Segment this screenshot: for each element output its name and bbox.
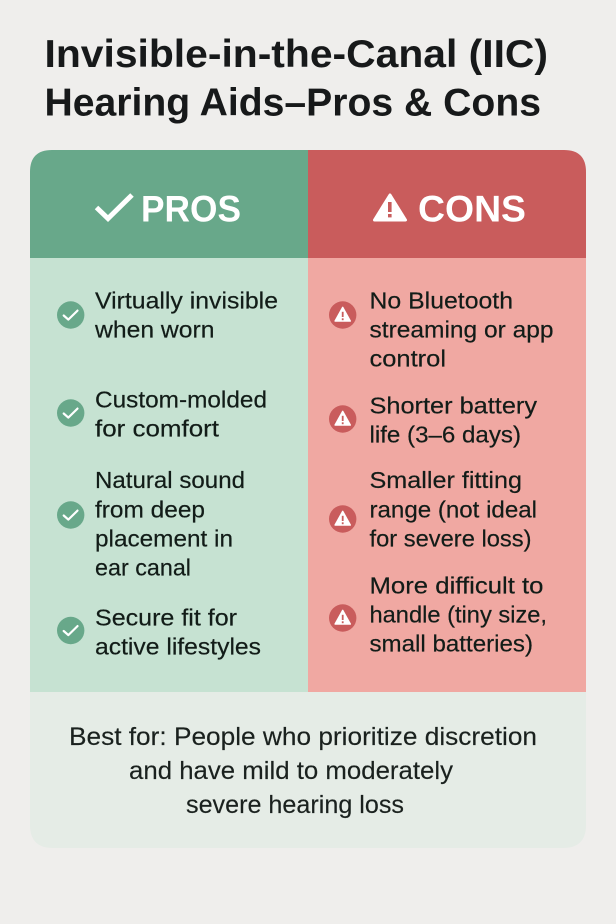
con item: no bluetooth: control [370, 346, 446, 372]
pro item: custom-molded: for comfort [95, 416, 220, 442]
con item: fitting range [329, 467, 537, 552]
panel: cons [308, 150, 586, 692]
con item: battery life [329, 392, 537, 448]
title: Hearing Aids–Pros & Cons [44, 82, 541, 124]
pro item: virtually invisible [57, 288, 278, 342]
con item: no bluetooth: streaming or app [370, 316, 554, 342]
pros header: PROS [141, 188, 241, 230]
con item: no bluetooth: No Bluetooth [370, 288, 513, 314]
con item: battery life: life (3–6 days) [370, 422, 521, 448]
con item: fitting range: range (not ideal [370, 496, 537, 522]
panel: pros [30, 150, 308, 692]
con item: no bluetooth [329, 288, 554, 372]
pro item: natural sound: placement in [95, 526, 233, 552]
panel: best for summary: Best for: People who prioritize discretion [69, 723, 537, 751]
pro item: custom-molded [57, 386, 267, 442]
pro item: natural sound: from deep [95, 496, 205, 522]
con item: battery life: Shorter battery [370, 392, 537, 418]
pro item: secure fit: Secure fit for [95, 604, 237, 630]
title [44, 33, 548, 124]
pro item: virtually invisible: Virtually invisible [95, 288, 278, 314]
pro item: natural sound [57, 467, 245, 580]
panel: best for summary: severe hearing loss [186, 791, 404, 819]
con item: difficult to handle: handle (tiny size, [370, 602, 547, 628]
pro item: custom-molded: Custom-molded [95, 386, 267, 412]
con item: difficult to handle: More difficult to [370, 572, 544, 598]
cons header [308, 150, 586, 258]
cons header: CONS [418, 188, 526, 230]
pro item: natural sound: Natural sound [95, 467, 245, 493]
pros header [30, 150, 308, 258]
panel: best for summary: and have mild to moderately [129, 757, 454, 785]
pro item: secure fit: active lifestyles [95, 634, 261, 660]
cons body [308, 258, 586, 692]
con item: fitting range: for severe loss) [370, 526, 532, 552]
title: Invisible-in-the-Canal (IIC) [44, 33, 548, 76]
pro item: natural sound: ear canal [95, 554, 191, 580]
pros body [30, 258, 308, 692]
con item: fitting range: Smaller fitting [370, 467, 522, 493]
icon: large check mark [96, 195, 132, 218]
pro item: secure fit [57, 604, 261, 660]
con item: difficult to handle [329, 572, 547, 656]
pro item: virtually invisible: when worn [94, 316, 214, 342]
icon: warning triangle [374, 195, 406, 220]
con item: difficult to handle: small batteries) [370, 630, 533, 656]
panel: best for summary [30, 692, 586, 848]
